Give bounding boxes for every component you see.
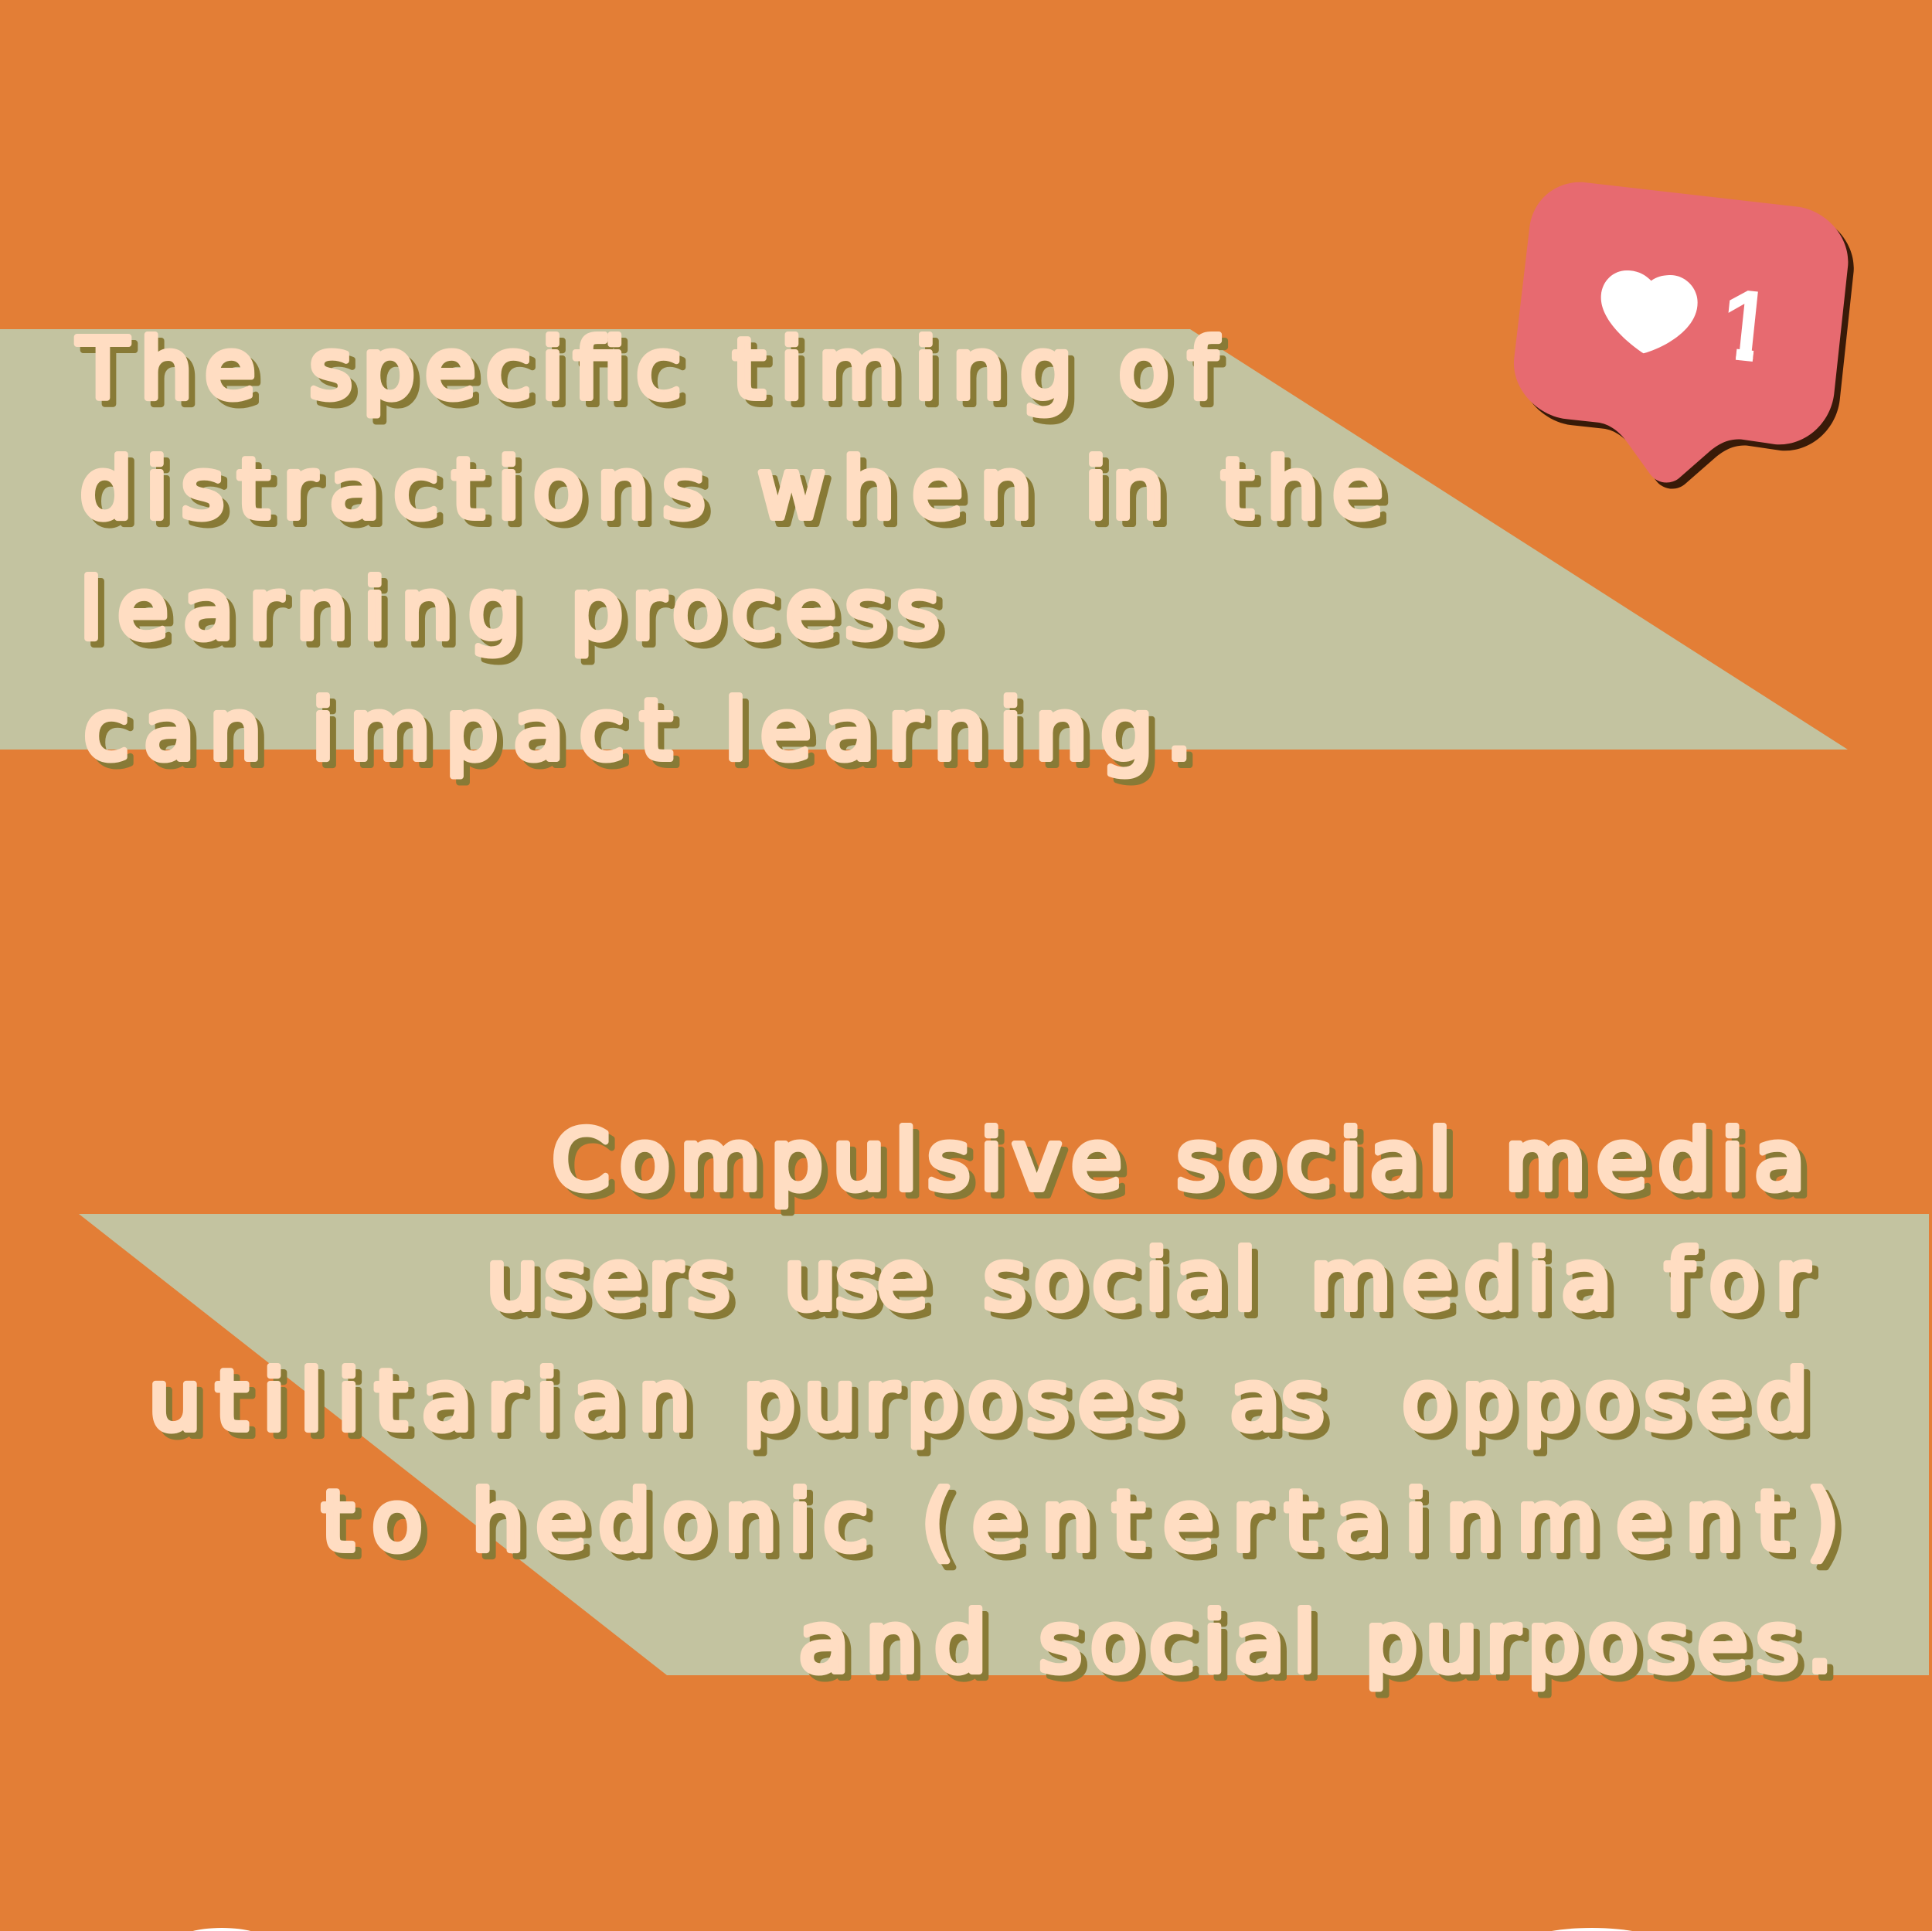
line 3: process — [570, 562, 940, 658]
panel: bottom band — [79, 1214, 1929, 1675]
line 4: learning. — [724, 682, 1192, 779]
icon: like notification bubble — [1514, 182, 1854, 489]
line 2: users — [486, 1232, 730, 1329]
line 2: media — [1310, 1232, 1612, 1329]
line 3: utilitarian — [148, 1353, 691, 1450]
line 5: purposes. — [1365, 1595, 1833, 1691]
text block: bottom statement — [148, 1113, 1839, 1691]
line 3: as — [1230, 1353, 1325, 1450]
icon: heart — [1601, 270, 1698, 353]
line 1: timing — [733, 321, 1073, 418]
line 3: opposed — [1402, 1353, 1808, 1450]
line 1: of — [1118, 321, 1219, 418]
text block: top statement — [77, 321, 1383, 779]
bubble shadow — [1519, 189, 1854, 489]
panel: top band — [0, 329, 1848, 750]
line 4: can — [83, 682, 262, 779]
line 1: media — [1505, 1113, 1805, 1209]
line 2: in — [1084, 441, 1165, 538]
bottom edge shape left — [177, 1928, 267, 1931]
line 3: learning — [80, 562, 521, 658]
line 2: the — [1221, 441, 1383, 538]
line 2: use — [784, 1232, 928, 1329]
line 1: The — [77, 321, 256, 418]
line 4: (entertainment) — [921, 1474, 1839, 1570]
line 5: and — [798, 1595, 987, 1691]
line 5: social — [1039, 1595, 1316, 1691]
line 1: specific — [309, 321, 682, 418]
like count: 1 — [1714, 270, 1779, 382]
line 3: purposes — [743, 1353, 1180, 1450]
line 2: distractions — [80, 441, 706, 538]
line 2: social — [983, 1232, 1257, 1329]
line 1: social — [1176, 1113, 1451, 1209]
line 2: when — [757, 441, 1032, 538]
bubble body — [1514, 182, 1848, 483]
bottom edge shape right — [1526, 1928, 1658, 1931]
line 4: hedonic — [471, 1474, 869, 1570]
line 4: to — [321, 1474, 423, 1570]
line 1: Compulsive — [552, 1113, 1122, 1209]
line 4: impact — [311, 682, 672, 779]
line 2: for — [1665, 1232, 1810, 1329]
